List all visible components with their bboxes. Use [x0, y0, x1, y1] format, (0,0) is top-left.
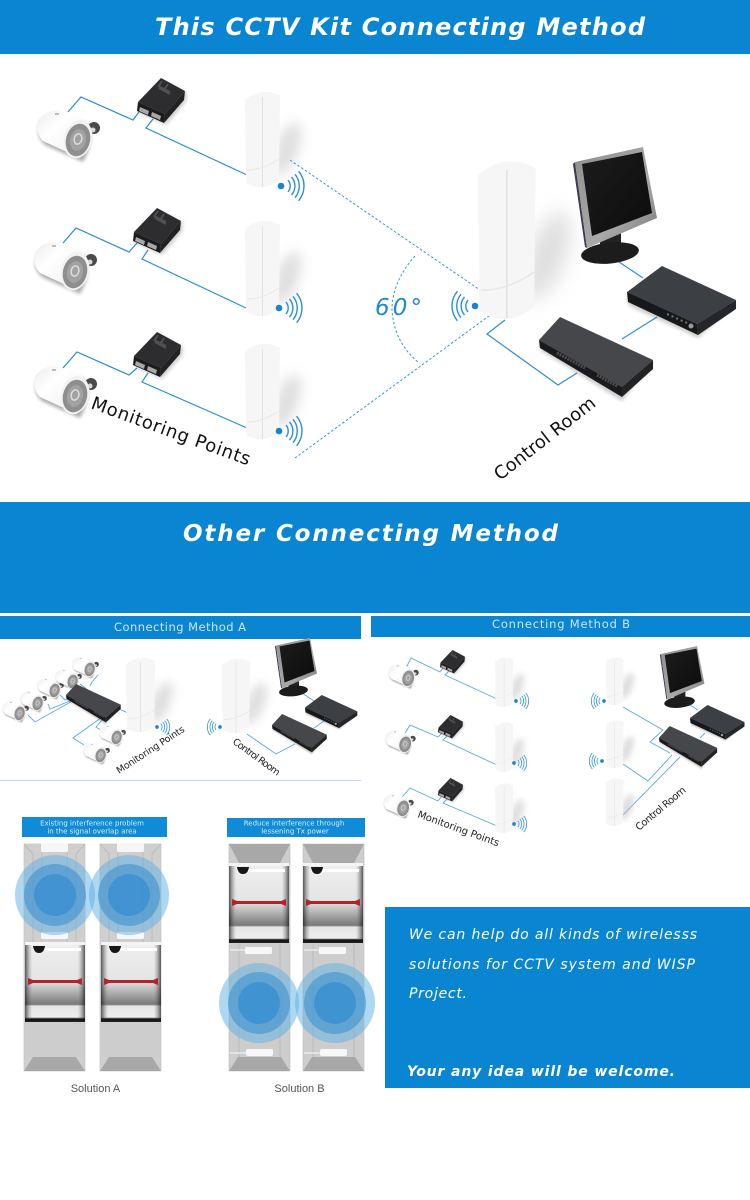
PoE injector 3 — [133, 332, 183, 379]
elevator shaft B1 — [229, 844, 290, 1071]
connection lines B — [402, 658, 705, 826]
divider — [0, 780, 361, 781]
bridge A left — [126, 658, 177, 732]
monitor B — [660, 646, 704, 709]
header: reduce interference: Reduce interference through — [244, 820, 344, 828]
switch A right — [272, 714, 327, 754]
section banner: Other Connecting Method: Other Connecting Method — [183, 521, 559, 547]
label: Monitoring Points: Monitoring Points — [88, 393, 253, 470]
connection lines A — [28, 675, 324, 754]
label: Monitoring Points A: Monitoring Points — [115, 724, 187, 777]
PoE injector 2 — [133, 208, 183, 255]
cameras A — [2, 657, 126, 765]
elevator shaft A1 — [24, 843, 85, 1071]
header: reduce interference: lessening Tx power — [261, 828, 329, 836]
wireless bridge: control room — [478, 161, 580, 319]
wifi A left — [155, 719, 170, 735]
panel: Connecting Method A — [0, 616, 361, 781]
header: interference problem — [22, 817, 167, 837]
wireless bridge 3 — [245, 344, 307, 439]
DVR recorder — [627, 266, 736, 338]
signal circles A2 — [89, 855, 169, 935]
wifi A right — [207, 719, 222, 735]
wifi signal 1 — [278, 171, 304, 201]
main diagram: connection kit — [34, 78, 736, 485]
signal circles A1 — [15, 855, 95, 935]
camera 1 — [37, 110, 100, 162]
callout: wireless solutions message — [385, 907, 750, 1088]
callout text: We can help do all kinds of wirelesss — [409, 927, 697, 943]
connection lines: monitoring points — [63, 97, 247, 428]
wifi signals B — [512, 693, 606, 832]
camera 2 — [34, 242, 97, 294]
callout text: Project. — [409, 986, 467, 1002]
label: Solution B: Solution B — [274, 1083, 325, 1095]
wifi signal: control room — [452, 291, 478, 321]
label: Monitoring Points B: Monitoring Points — [416, 809, 501, 849]
wireless bridge 1 — [245, 92, 307, 187]
header: interference problem: in the signal overlap area — [47, 828, 137, 836]
wifi signal 3 — [276, 416, 302, 446]
camera 3 — [34, 366, 97, 418]
signal circles B2 — [295, 963, 375, 1043]
label: Solution A: Solution A — [71, 1083, 121, 1095]
injectors B — [438, 650, 466, 802]
header: reduce interference — [227, 818, 365, 837]
DVR A — [305, 695, 357, 730]
label: Control Room: Control Room — [490, 393, 600, 485]
title banner: This CCTV Kit Connecting Method: This CCTV Kit Connecting Method — [155, 13, 646, 41]
cameras B — [384, 664, 419, 819]
control room lines — [487, 258, 657, 385]
section banner: Other Connecting Method — [0, 502, 750, 613]
60 degree coverage sector: 60° — [375, 295, 422, 321]
switch A left — [66, 684, 121, 724]
60 degree coverage sector — [290, 160, 493, 458]
elevator shaft B2 — [303, 844, 364, 1071]
wifi signal 2 — [276, 293, 302, 323]
label: Control Room B: Control Room — [634, 785, 688, 833]
signal circles B1 — [219, 963, 299, 1043]
monitor — [573, 147, 657, 266]
network switch — [539, 317, 653, 401]
DVR B — [690, 705, 744, 741]
wireless bridge 2 — [245, 221, 307, 316]
header: Connecting Method B — [371, 616, 750, 637]
callout text: solutions for CCTV system and WISP — [409, 957, 696, 973]
PoE injector 1 — [137, 78, 187, 125]
header: interference problem: Existing interference problem — [40, 820, 144, 828]
panel: Solution A — [15, 817, 169, 1095]
bridge A right — [222, 659, 272, 733]
switch B — [659, 726, 717, 769]
title banner: This CCTV Kit Connecting Method — [0, 0, 750, 54]
header: Connecting Method A: Connecting Method A — [114, 620, 246, 634]
panel: Solution B — [219, 818, 375, 1095]
callout text: Your any idea will be welcome. — [407, 1064, 675, 1080]
callout text — [407, 927, 697, 1080]
header: Connecting Method B: Connecting Method B — [492, 617, 630, 631]
bridges B — [495, 657, 637, 833]
monitor A — [275, 638, 317, 698]
panel: Connecting Method B — [371, 616, 750, 849]
label: Control Room A: Control Room — [230, 737, 282, 778]
elevator shaft A2 — [100, 843, 161, 1071]
header: Connecting Method A — [0, 616, 361, 639]
